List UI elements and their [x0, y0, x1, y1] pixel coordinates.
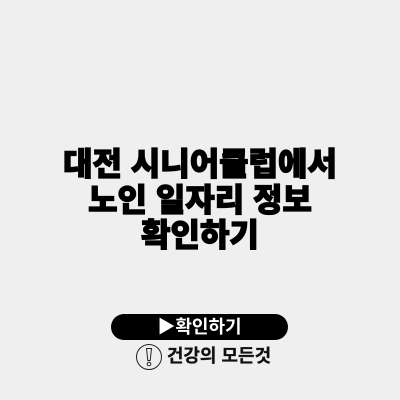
icon: exclamation circle: [136, 344, 162, 370]
button: confirm: [111, 314, 288, 340]
title: 노인 일자리 정보: [88, 182, 312, 218]
title: 확인하기: [141, 217, 259, 253]
site name: 건강의 모든것: [167, 346, 271, 366]
title: [63, 146, 337, 253]
title: 대전 시니어클럽에서: [63, 146, 337, 182]
button: confirm: ▶확인하기: [157, 317, 242, 337]
